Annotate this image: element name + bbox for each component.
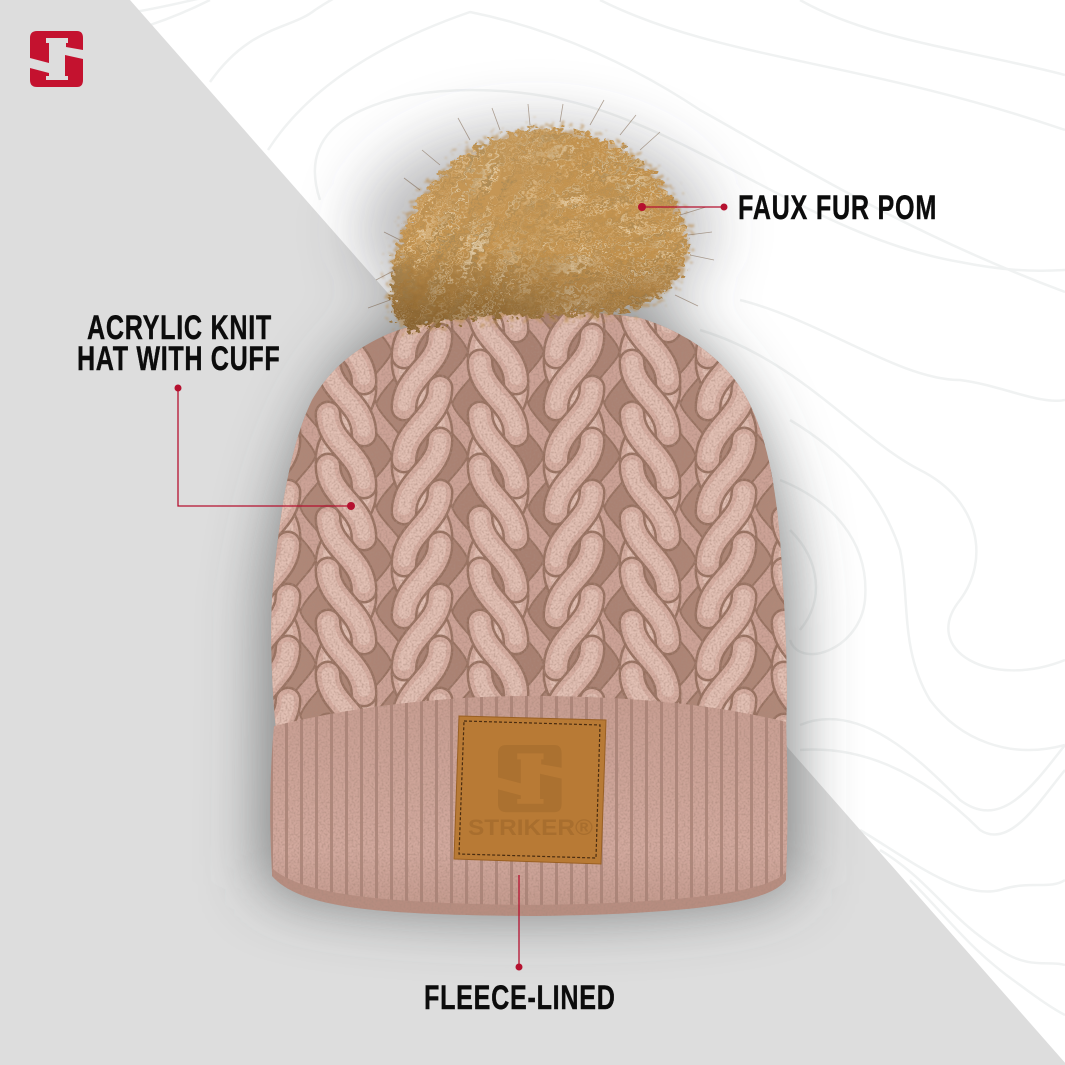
callout: faux fur pom <box>638 189 936 227</box>
hat crown with cable knit <box>260 305 800 735</box>
soft shadow behind hat <box>262 125 795 914</box>
cuff with ribbing <box>270 696 788 916</box>
patch embossed wordmark: STRIKER® <box>468 815 593 840</box>
callout: acrylic knit hat with cuff <box>77 309 355 510</box>
callout: fleece-lined <box>424 875 615 1017</box>
callout: faux fur pom: FAUX FUR POM <box>738 189 936 227</box>
callout: acrylic knit hat with cuff: HAT WITH CUFF <box>77 340 280 378</box>
callout: acrylic knit hat with cuff: ACRYLIC KNIT <box>87 309 271 347</box>
faux fur pom <box>368 100 714 338</box>
callout: fleece-lined: FLEECE-LINED <box>424 979 615 1017</box>
leather patch <box>454 716 606 864</box>
patch embossed logo <box>498 745 562 812</box>
logo: Striker S <box>30 31 83 87</box>
hat <box>270 100 788 916</box>
